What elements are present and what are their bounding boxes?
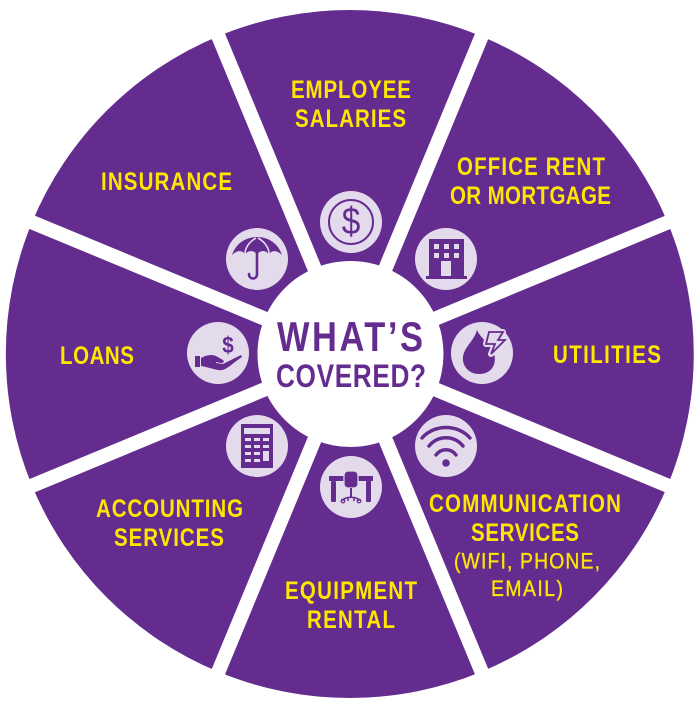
label: communication services — [429, 489, 621, 601]
label: communication services: EMAIL) — [491, 577, 563, 601]
label: equipment rental: EQUIPMENT — [285, 576, 417, 604]
label: communication services: COMMUNICATION — [429, 489, 621, 517]
icon: calculator — [226, 415, 288, 477]
panel: communication services — [350, 354, 668, 672]
icon: dollar coin — [320, 191, 382, 253]
label: accounting services: ACCOUNTING — [96, 494, 243, 522]
heading: covered: COVERED? — [276, 360, 426, 395]
label: employee salaries: EMPLOYEE — [291, 75, 411, 103]
icon: hand holding dollar: $ — [222, 332, 234, 358]
panel: office rent or mortgage — [350, 36, 668, 354]
heading: what's: WHAT’S — [277, 314, 423, 361]
label: accounting services: SERVICES — [114, 523, 224, 551]
label: office rent or mortgage — [450, 152, 611, 209]
label: equipment rental: RENTAL — [307, 605, 395, 633]
label: communication services: SERVICES — [471, 518, 579, 546]
label: employee salaries — [291, 75, 411, 132]
panel: insurance — [32, 36, 350, 354]
label: insurance: INSURANCE — [101, 167, 232, 195]
label: loans: LOANS — [60, 341, 134, 369]
label: employee salaries: SALARIES — [295, 104, 406, 132]
panel: accounting services — [32, 354, 350, 672]
icon: water drop and lightning bolt — [451, 322, 513, 384]
label: equipment rental — [285, 576, 417, 633]
icon: umbrella — [226, 228, 288, 290]
icon: wifi — [415, 415, 477, 477]
icon: office building — [415, 228, 477, 290]
center hub: what's covered — [258, 261, 444, 447]
panel: loans — [6, 222, 350, 486]
icon: dollar coin: $ — [342, 200, 360, 242]
label: office rent or mortgage: OR MORTGAGE — [450, 181, 611, 209]
panel: utilities — [350, 222, 694, 486]
label: accounting services — [96, 494, 243, 551]
label: communication services: (WIFI, PHONE, — [454, 549, 600, 574]
icon: desk and chair — [320, 456, 382, 518]
icon: hand holding dollar — [187, 322, 249, 384]
label: office rent or mortgage: OFFICE RENT — [457, 152, 605, 180]
panel: employee salaries — [218, 10, 481, 354]
panel: equipment rental — [218, 354, 481, 698]
label: utilities: UTILITIES — [553, 340, 661, 368]
